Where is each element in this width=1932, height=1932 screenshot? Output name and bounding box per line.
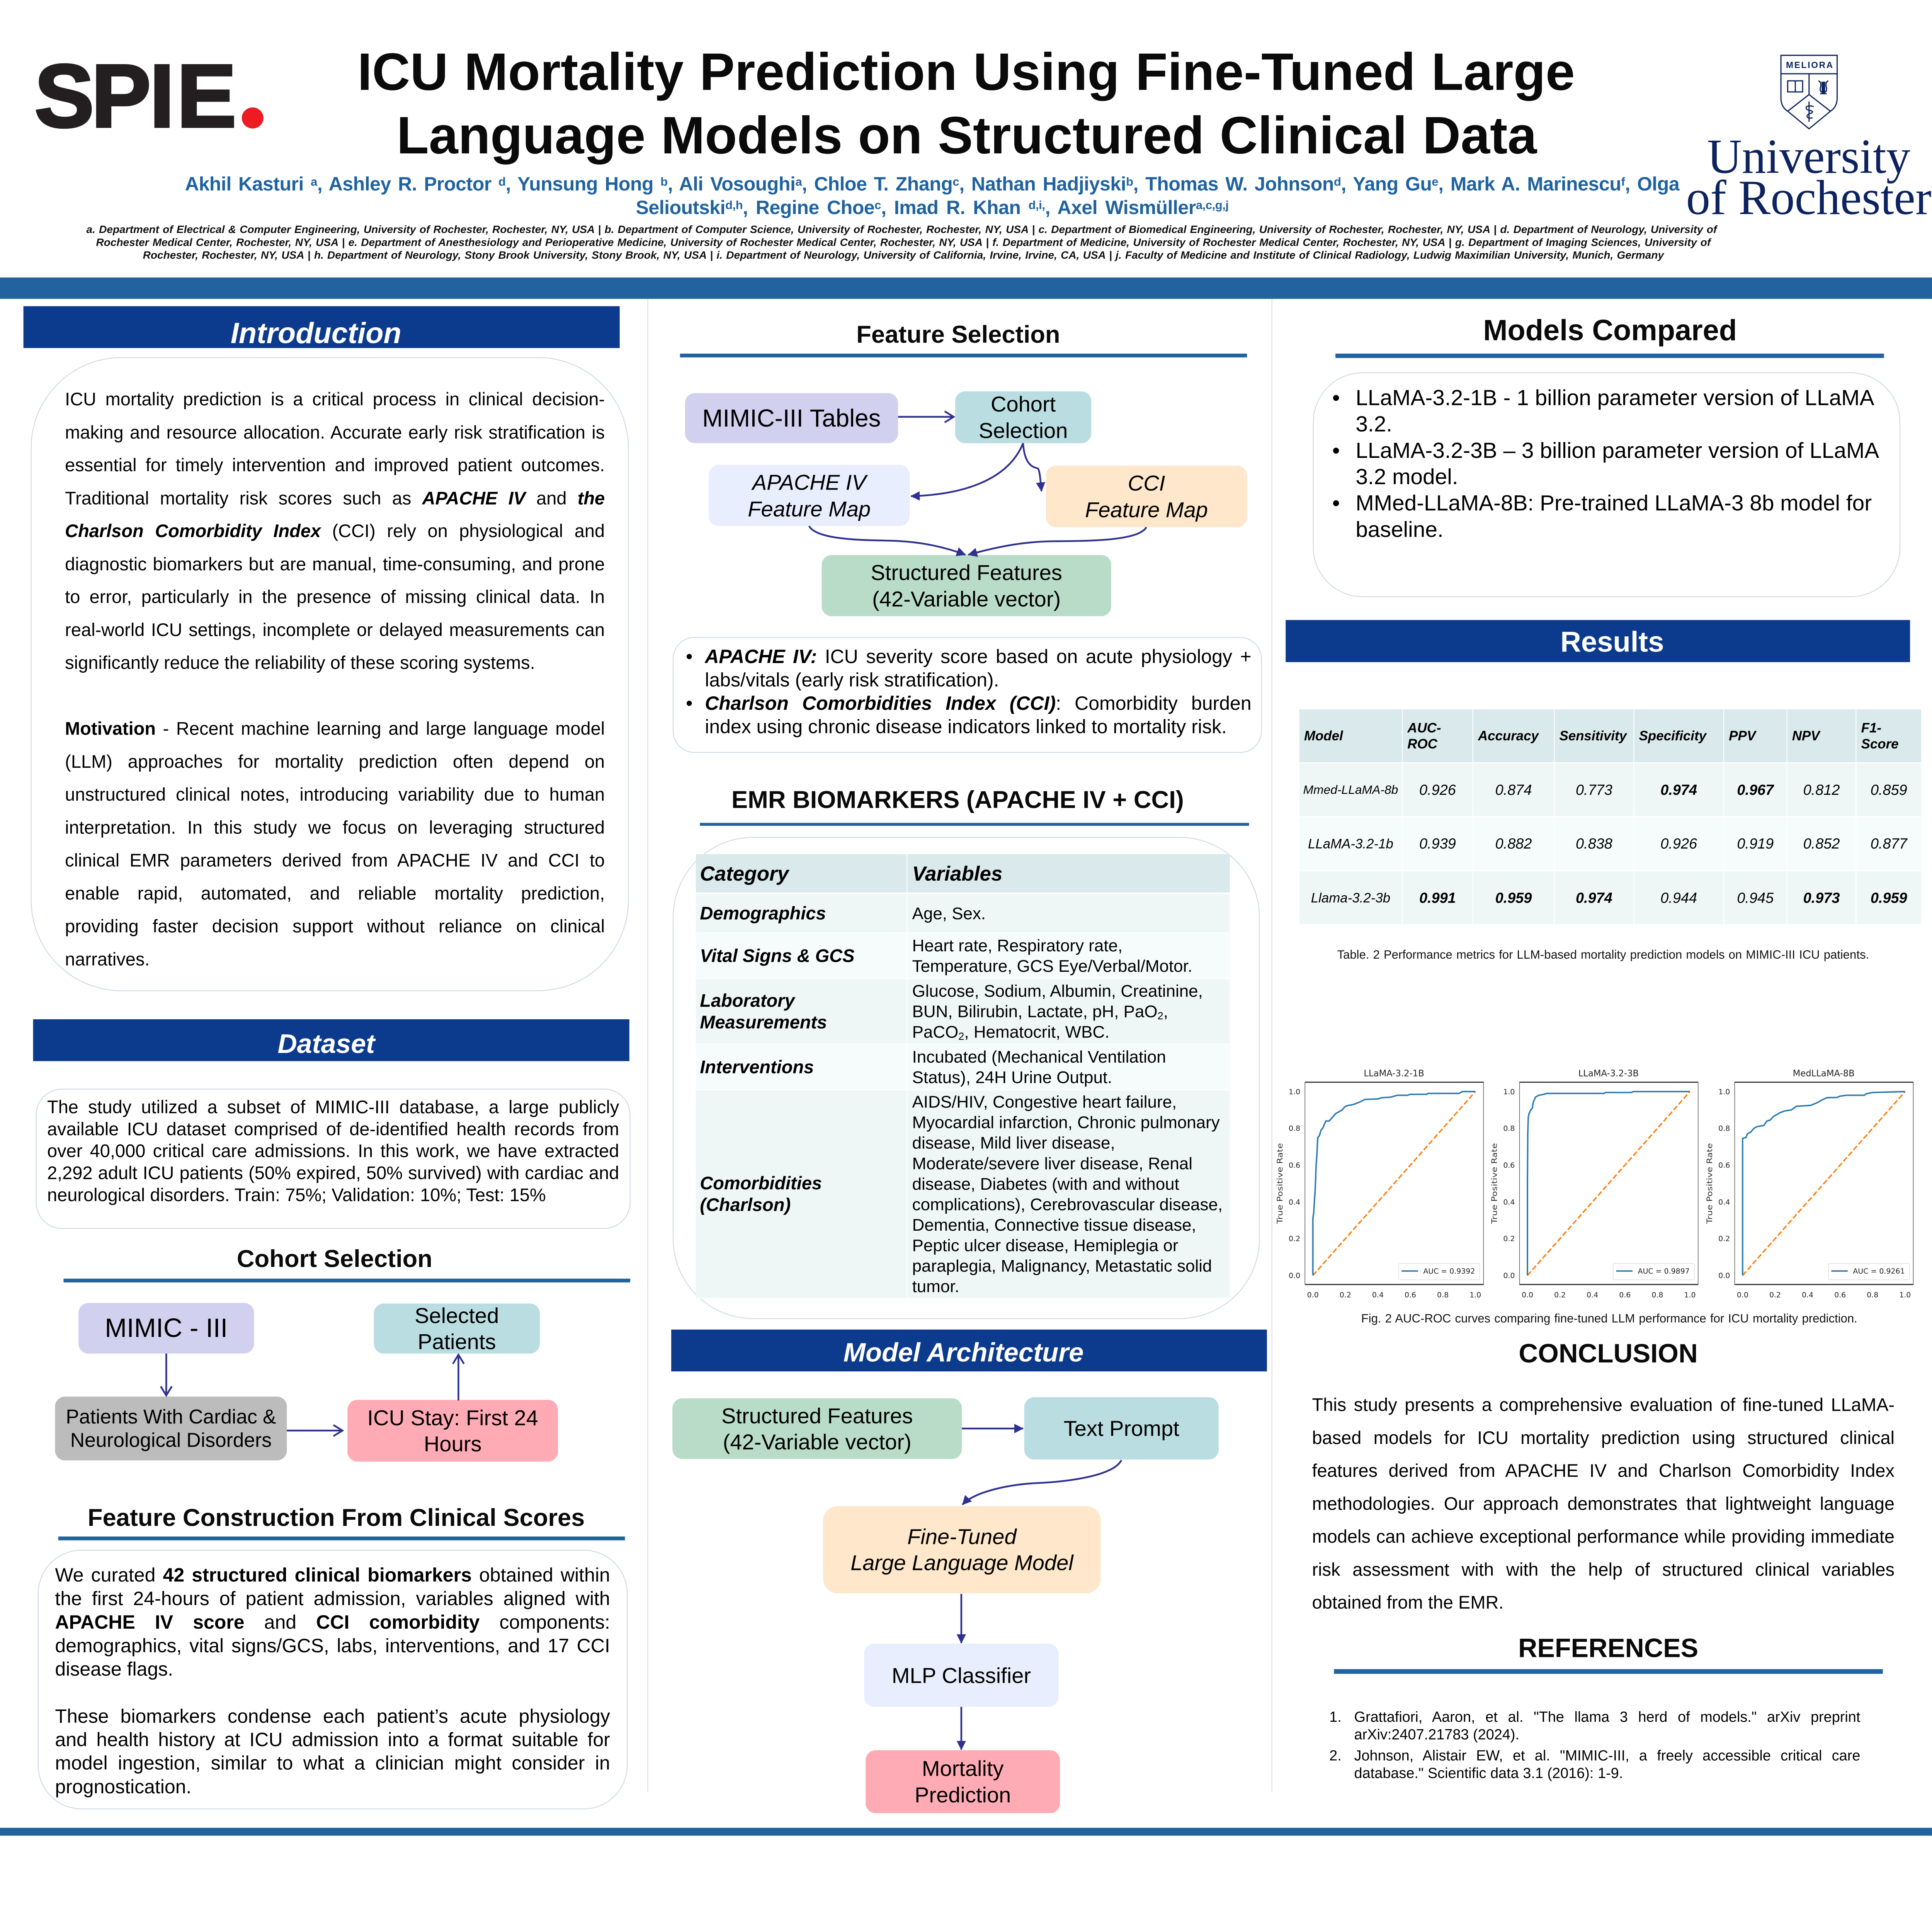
figure caption: Fig. 2 AUC-ROC curves comparing fine-tuned LLM performance for ICU mortality prediction.	[1361, 1312, 1857, 1325]
table: performance metrics: Mmed-LLaMA-8b	[1303, 783, 1398, 796]
box: MIMIC-III Tables: MIMIC-III Tables	[702, 404, 881, 432]
chart: ROC LLaMA-3.2-3B: 1.0	[1503, 1088, 1515, 1096]
box: CCI Feature Map: CCI	[1128, 471, 1165, 495]
conclusion text: based models for ICU mortality prediction using structured clinical	[1312, 1428, 1895, 1448]
chart: ROC LLaMA-3.2-1B: 0.0	[1289, 1272, 1300, 1280]
feature construction text: demographics, vital signs/GCS, labs, interventions, and 17 CCI	[55, 1634, 610, 1656]
table: performance metrics: 0.877	[1871, 835, 1907, 852]
chart: ROC LLaMA-3.2-1B: 0.8	[1289, 1124, 1300, 1133]
logo: University of Rochester: University	[1707, 129, 1910, 184]
table: performance metrics: 0.852	[1803, 835, 1840, 852]
table: performance metrics: Model	[1304, 728, 1343, 743]
box: CCI Feature Map	[1046, 466, 1247, 527]
panel: results	[1276, 620, 1921, 1328]
chart: ROC LLaMA-3.2-3B: 0.6	[1503, 1161, 1515, 1170]
reference list: 1.	[1329, 1709, 1342, 1725]
dataset text	[47, 1096, 619, 1206]
chart: ROC LLaMA-3.2-3B: 0.4	[1587, 1291, 1598, 1299]
score definitions text: labs/vitals (early risk stratification).	[705, 669, 999, 690]
table: categories and variables: complications), Cerebrovascular disease,	[912, 1195, 1223, 1214]
table: performance metrics: 0.944	[1660, 889, 1697, 906]
table: categories and variables: Age, Sex.	[912, 904, 986, 923]
arrow: Large Language Model to MLP	[960, 1594, 963, 1643]
feature construction text: prognostication.	[55, 1776, 191, 1797]
introduction text: Traditional mortality risk scores such as APACHE IV and the	[65, 488, 605, 509]
introduction text: diagnostic biomarkers but are manual, time-consuming, and prone	[65, 554, 605, 574]
heading: Dataset: Dataset	[277, 1029, 375, 1059]
heading: Models Compared: Models Compared	[1483, 314, 1737, 347]
model list: LLaMA-3.2-3B – 3 billion parameter version of LLaMA	[1355, 438, 1879, 463]
heading: Conclusion: CONCLUSION	[1519, 1338, 1698, 1368]
chart: ROC LLaMA-3.2-1B: 0.6	[1405, 1291, 1416, 1299]
chart: ROC LLaMA-3.2-3B: 0.2	[1554, 1291, 1566, 1299]
model list: 3.2.	[1355, 412, 1392, 436]
authors	[185, 172, 1679, 219]
heading: Introduction: Introduction	[231, 317, 401, 350]
panel: feature construction	[38, 1503, 628, 1810]
box: Cohort Selection: Selection	[979, 418, 1068, 442]
box: MIMIC-III Tables	[685, 393, 898, 443]
box: Structured Features: (42-Variable vector)	[872, 587, 1061, 611]
chart: ROC LLaMA-3.2-1B: 0.6	[1289, 1161, 1300, 1170]
arrow: MIMIC to Patients	[165, 1354, 167, 1396]
score definitions text	[686, 645, 1252, 738]
table: categories and variables: Variables	[912, 862, 1002, 885]
heading: Dataset	[33, 1019, 629, 1061]
box: MIMIC - III: MIMIC - III	[105, 1313, 228, 1343]
panel: conclusion	[1312, 1339, 1895, 1719]
box: Selected Patients	[374, 1303, 540, 1354]
chart: ROC MedLLaMA-8B	[1706, 1063, 1917, 1306]
chart: ROC LLaMA-3.2-3B: 0.8	[1503, 1124, 1515, 1133]
box: Fine-Tuned Large Language Model: Large Language Model	[850, 1551, 1073, 1575]
chart: ROC MedLLaMA-8B: AUC = 0.9261	[1853, 1267, 1905, 1276]
introduction text: ICU mortality prediction is a critical process in clinical decision-	[65, 389, 605, 410]
introduction text: Motivation - Recent machine learning and large language model	[65, 719, 605, 739]
feature construction text: disease flags.	[55, 1658, 173, 1680]
table: categories and variables: Dementia, Connective tissue disease,	[912, 1215, 1196, 1234]
introduction text: clinical EMR parameters derived from APACHE IV and CCI to	[65, 850, 605, 871]
box: ICU Stay	[347, 1400, 558, 1462]
table: performance metrics: Sensitivity	[1560, 728, 1627, 743]
box: Structured Features: Structured Features	[871, 560, 1062, 584]
table: performance metrics: F1-	[1861, 720, 1881, 735]
chart: ROC LLaMA-3.2-3B: 0.0	[1522, 1291, 1533, 1299]
panel: EMR biomarkers	[673, 785, 1260, 1319]
table: performance metrics: 0.773	[1576, 782, 1612, 798]
feature construction text: and health history at ICU admission into a format suitable for	[55, 1729, 610, 1750]
table: categories and variables: Category	[700, 862, 789, 885]
table: performance metrics: PPV	[1729, 728, 1756, 743]
authors: Akhil Kasturi a, Ashley R. Proctor d, Yunsung Hong b, Ali Vosoughia, Chloe T. Zhangc, Nathan Hadjiyskib, Thomas W. Johnsond, Yang Gue, Mark A. Marinescuf, Olga	[185, 173, 1679, 195]
rounded text panel	[31, 357, 629, 991]
title	[357, 40, 1575, 167]
model list: LLaMA-3.2-1B - 1 billion parameter version of LLaMA	[1355, 385, 1874, 410]
box: Fine-Tuned Large Language Model	[823, 1506, 1100, 1593]
box: Patients With Cardiac and Neurological Disorders: Patients With Cardiac &	[66, 1406, 276, 1428]
chart: ROC LLaMA-3.2-1B: 1.0	[1289, 1088, 1300, 1096]
box: Mortality Prediction: Mortality	[922, 1756, 1004, 1781]
table: performance metrics: 0.991	[1419, 889, 1456, 906]
chart: ROC LLaMA-3.2-1B: 0.0	[1307, 1291, 1319, 1299]
model list	[1332, 384, 1888, 543]
table: categories and variables: Glucose, Sodium, Albumin, Creatinine,	[912, 981, 1203, 1000]
chart: ROC LLaMA-3.2-1B: LLaMA-3.2-1B	[1364, 1069, 1424, 1079]
chart: ROC LLaMA-3.2-3B: 0.6	[1619, 1291, 1631, 1299]
panel: models compared	[1313, 313, 1900, 597]
chart: ROC MedLLaMA-8B: 0.6	[1718, 1161, 1730, 1170]
dataset text: The study utilized a subset of MIMIC-III database, a large publicly	[47, 1097, 619, 1117]
chart: ROC MedLLaMA-8B: 0.2	[1769, 1291, 1781, 1299]
table: categories and variables: Heart rate, Respiratory rate,	[912, 936, 1122, 955]
arrow: Structured Features to Text Prompt	[962, 1427, 1023, 1430]
heading: Feature Construction From Clinical Scores: Feature Construction From Clinical Scores	[88, 1504, 585, 1531]
table: performance metrics: 0.859	[1871, 782, 1907, 798]
box: Text Prompt	[1024, 1397, 1219, 1459]
introduction text: narratives.	[65, 949, 150, 969]
arrow: Patients to ICU Stay	[287, 1429, 343, 1432]
feature construction text: These biomarkers condense each patient’s acute physiology	[55, 1705, 610, 1727]
panel: references	[1329, 1634, 1883, 1786]
box: Structured Features: (42-Variable vector)	[723, 1430, 912, 1454]
introduction text: unstructured clinical notes, introducing variability due to human	[65, 784, 605, 805]
panel: dataset	[33, 1019, 631, 1229]
model list: MMed-LLaMA-8B: Pre-trained LLaMA-3 8b model for	[1355, 491, 1872, 515]
rounded text panel	[38, 1550, 628, 1810]
box: Structured Features: Structured Features	[721, 1403, 913, 1428]
box: Patients With Cardiac and Neurological Disorders: Neurological Disorders	[70, 1429, 272, 1451]
chart: ROC MedLLaMA-8B: 0.8	[1867, 1291, 1878, 1299]
arrow: MIMIC-III Tables to Cohort Selection	[898, 416, 954, 418]
chart: ROC LLaMA-3.2-3B: 0.0	[1503, 1272, 1515, 1280]
box: Structured Features	[672, 1398, 962, 1459]
reference list: Johnson, Alistair EW, et al. "MIMIC-III, a freely accessible critical care	[1354, 1747, 1860, 1764]
arrow: Cohort Selection to CCI	[1023, 443, 1041, 491]
chart: ROC LLaMA-3.2-1B	[1276, 1063, 1487, 1306]
heading: Cohort Selection: Cohort Selection	[237, 1245, 432, 1272]
introduction text: providing faster decision support without reliance on clinical	[65, 916, 605, 936]
chart: ROC MedLLaMA-8B: 0.4	[1802, 1291, 1813, 1299]
panel: model architecture	[671, 1330, 1267, 1813]
arrow: APACHE to Structured Features	[809, 526, 965, 555]
box: APACHE IV Feature Map: APACHE IV	[752, 470, 866, 494]
table: performance metrics: 0.974	[1576, 889, 1612, 906]
conclusion text: features derived from APACHE IV and Charlson Comorbidity Index	[1312, 1461, 1895, 1481]
table: performance metrics: 0.919	[1737, 835, 1774, 852]
box: ICU Stay: Hours	[424, 1432, 481, 1456]
table: performance metrics: NPV	[1792, 728, 1820, 743]
heading: Feature Selection: Feature Selection	[856, 321, 1060, 348]
introduction text: real-world ICU settings, incomplete or delayed measurements can	[65, 620, 605, 640]
chart: ROC LLaMA-3.2-3B: 0.2	[1503, 1235, 1515, 1243]
box: Selected Patients: Patients	[418, 1330, 496, 1354]
feature construction text: the first 24-hours of patient admission, variables aligned with	[55, 1588, 610, 1609]
table: categories and variables: disease, Diabetes (with and without	[912, 1174, 1179, 1193]
heading: Results: Results	[1560, 626, 1664, 658]
feature construction text: We curated 42 structured clinical biomarkers obtained within	[55, 1564, 610, 1586]
table: categories and variables: AIDS/HIV, Congestive heart failure,	[912, 1092, 1177, 1111]
panel: cohort selection	[55, 1244, 630, 1462]
table: performance metrics: LLaMA-3.2-1b	[1308, 836, 1393, 851]
box: Selected Patients: Selected	[415, 1303, 499, 1328]
title: ICU Mortality Prediction Using Fine-Tuned Large	[357, 43, 1575, 101]
box: Cohort Selection: Cohort	[991, 392, 1056, 416]
logo: University of Rochester	[1683, 53, 1932, 219]
table: performance metrics: Score	[1861, 736, 1899, 751]
table: performance metrics: 0.973	[1803, 889, 1840, 906]
table: categories and variables: BUN, Bilirubin, Lactate, pH, PaO2,	[912, 1002, 1168, 1022]
score definitions text: •	[686, 692, 693, 714]
affiliations: Rochester Medical Center, Rochester, NY, USA | e. Department of Anesthesiology and Perioperative Medicine, University of Rochester Medical Center, Rochester, NY, USA | f. Department of Medicine, University of Rochester Medical Center, Rochester, NY, USA | g. Department of Imaging Sciences, University of	[96, 236, 1711, 248]
box: APACHE IV Feature Map: Feature Map	[748, 497, 871, 521]
rounded panel	[673, 837, 1260, 1319]
heading: Model Architecture	[671, 1330, 1267, 1371]
chart: ROC MedLLaMA-8B: 0.4	[1718, 1198, 1730, 1206]
chart: ROC LLaMA-3.2-1B: 0.2	[1289, 1235, 1300, 1243]
heading: References: REFERENCES	[1518, 1634, 1698, 1663]
conclusion text: methodologies. Our approach demonstrates that lightweight language	[1312, 1494, 1895, 1514]
chart: ROC LLaMA-3.2-1B: 0.2	[1340, 1291, 1351, 1299]
box: Mortality Prediction	[866, 1750, 1060, 1813]
table: categories and variables: Myocardial infarction, Chronic pulmonary	[912, 1113, 1220, 1132]
chart: ROC LLaMA-3.2-1B: 1.0	[1469, 1291, 1481, 1299]
chart: ROC LLaMA-3.2-1B: AUC = 0.9392	[1423, 1267, 1475, 1276]
chart: ROC LLaMA-3.2-1B: 0.4	[1289, 1198, 1300, 1206]
reference list	[1329, 1708, 1860, 1782]
table: performance metrics: 0.974	[1660, 782, 1697, 798]
table: categories and variables: Measurements	[700, 1012, 827, 1032]
score definitions text: index using chronic disease indicators linked to mortality risk.	[705, 716, 1227, 737]
header band	[0, 0, 1932, 299]
arrow: ICU Stay to Selected	[457, 1354, 459, 1400]
table: performance metrics: 0.926	[1419, 782, 1456, 798]
table: performance metrics: 0.959	[1495, 889, 1532, 906]
feature construction text: APACHE IV score and CCI comorbidity components:	[55, 1611, 610, 1633]
arrow: Text Prompt to Large Language Model	[963, 1460, 1121, 1505]
introduction text: essential for timely intervention and improved patient outcomes.	[65, 455, 605, 475]
box: Fine-Tuned Large Language Model: Fine-Tuned	[907, 1524, 1017, 1549]
feature construction text	[55, 1563, 610, 1798]
score definitions text: APACHE IV: ICU severity score based on acute physiology +	[705, 645, 1252, 667]
score definitions text: •	[686, 645, 693, 667]
introduction text: interpretation. In this study we focus on leveraging structured	[65, 818, 605, 838]
introduction text: enable rapid, automated, and reliable mortality prediction,	[65, 883, 605, 903]
model list: •	[1332, 491, 1340, 515]
table: categories and variables: Incubated (Mechanical Ventilation	[912, 1047, 1166, 1066]
table: categories and variables: disease, Mild liver disease,	[912, 1133, 1115, 1152]
chart: ROC LLaMA-3.2-3B: LLaMA-3.2-3B	[1578, 1069, 1639, 1079]
introduction text: making and resource allocation. Accurate early risk stratification is	[65, 422, 605, 442]
arrow: Cohort Selection to APACHE	[911, 443, 1023, 496]
table: performance metrics: 0.939	[1419, 835, 1456, 852]
heading: EMR Biomarkers: EMR BIOMARKERS (APACHE IV + CCI)	[731, 786, 1184, 813]
conclusion text: models can achieve exceptional performance while providing immediate	[1312, 1527, 1895, 1547]
chart: ROC LLaMA-3.2-3B	[1491, 1063, 1702, 1306]
table: performance metrics	[1299, 709, 1921, 924]
box: CCI Feature Map: Feature Map	[1085, 498, 1208, 522]
model list: •	[1332, 438, 1340, 463]
table: categories and variables: Vital Signs & GCS	[700, 946, 855, 966]
chart: ROC MedLLaMA-8B: 0.8	[1718, 1124, 1730, 1133]
reference list: database." Scientific data 3.1 (2016): 1-9.	[1354, 1765, 1623, 1781]
reference list: 2.	[1329, 1747, 1342, 1764]
model list: 3.2 model.	[1355, 464, 1458, 489]
rounded panel	[1313, 372, 1900, 597]
conclusion text: obtained from the EMR.	[1312, 1592, 1503, 1612]
table: categories and variables	[696, 854, 1230, 1299]
table: categories and variables: Status), 24H Urine Output.	[912, 1068, 1112, 1087]
box: APACHE IV Feature Map	[709, 465, 910, 526]
box: MLP Classifier	[864, 1644, 1058, 1707]
table caption: Table. 2 Performance metrics for LLM-based mortality prediction models on MIMIC-III ICU patients.	[1337, 948, 1869, 961]
affiliations	[86, 223, 1717, 262]
chart: ROC MedLLaMA-8B: 0.6	[1834, 1291, 1846, 1299]
header blue bar	[0, 277, 1932, 299]
chart: ROC MedLLaMA-8B: 0.0	[1718, 1272, 1730, 1280]
table: categories and variables: Peptic ulcer disease, Hemiplegia or	[912, 1236, 1178, 1255]
rounded text panel	[36, 1088, 631, 1229]
table: performance metrics: 0.945	[1737, 889, 1774, 906]
heading: Results	[1286, 620, 1910, 662]
panel: introduction	[24, 306, 629, 991]
table: performance metrics: Llama-3.2-3b	[1311, 890, 1390, 905]
model list: baseline.	[1355, 517, 1444, 542]
introduction text: significantly reduce the reliability of these scoring systems.	[65, 653, 535, 673]
reference list: Grattafiori, Aaron, et al. "The llama 3 herd of models." arXiv preprint	[1354, 1709, 1860, 1725]
table: categories and variables: (Charlson)	[700, 1195, 791, 1215]
heading: Model Architecture: Model Architecture	[844, 1338, 1083, 1367]
dataset text: over 40,000 critical care admissions. In this work, we have extracted	[47, 1141, 619, 1161]
table: categories and variables: PaCO2, Hematocrit, WBC.	[912, 1022, 1109, 1042]
table: performance metrics: 0.874	[1495, 782, 1532, 798]
introduction text: (LLM) approaches for mortality prediction often depend on	[65, 752, 605, 772]
chart: ROC LLaMA-3.2-1B: 0.8	[1437, 1291, 1449, 1299]
chart: ROC MedLLaMA-8B: 0.0	[1737, 1291, 1748, 1299]
conclusion text	[1312, 1389, 1895, 1619]
table: categories and variables: Interventions	[700, 1057, 814, 1077]
feature construction text: model ingestion, similar to what a clinician might consider in	[55, 1752, 610, 1774]
heading: Introduction	[24, 306, 620, 348]
table: performance metrics: 0.812	[1803, 782, 1840, 798]
table: categories and variables: tumor.	[912, 1277, 959, 1296]
introduction text: to error, particularly in the presence of missing clinical data. In	[65, 587, 605, 607]
table: performance metrics: 0.967	[1737, 782, 1774, 798]
box: MLP Classifier: MLP Classifier	[892, 1663, 1031, 1687]
box: Mortality Prediction: Prediction	[915, 1782, 1011, 1807]
panel: feature selection	[673, 320, 1262, 753]
chart: ROC MedLLaMA-8B: 0.2	[1718, 1235, 1730, 1243]
reference list: arXiv:2407.21783 (2024).	[1354, 1726, 1519, 1743]
chart: ROC LLaMA-3.2-3B: 1.0	[1684, 1291, 1696, 1299]
chart: ROC MedLLaMA-8B: 1.0	[1718, 1088, 1730, 1096]
affiliations: Rochester, Rochester, NY, USA | h. Department of Neurology, Stony Brook University, Stony Brook, NY, USA | i. Department of Neurology, University of California, Irvine, Irvine, CA, USA | j. Faculty of Medicine and Institute of Clinical Radiology, Ludwig Maximilian University, Munich, Germany	[143, 249, 1664, 261]
logo: University of Rochester: MELIORA	[1786, 60, 1833, 70]
authors: Selioutskid,h, Regine Choec, Imad R. Khan d,i,, Axel Wismüllera,c,g,j	[636, 196, 1229, 218]
box: Structured Features	[822, 555, 1111, 616]
arrow: MLP to Mortality Prediction	[960, 1707, 963, 1750]
box: Text Prompt: Text Prompt	[1064, 1416, 1179, 1440]
box: MIMIC - III	[78, 1303, 254, 1354]
table: performance metrics: 0.959	[1871, 889, 1907, 906]
footer blue bar	[0, 1828, 1932, 1836]
conclusion text: This study presents a comprehensive evaluation of fine-tuned LLaMA-	[1312, 1395, 1895, 1415]
table: performance metrics: 0.882	[1495, 835, 1532, 852]
dataset text: neurological disorders. Train: 75%; Validation: 10%; Test: 15%	[47, 1185, 546, 1205]
table: performance metrics: Specificity	[1639, 728, 1706, 743]
table: performance metrics: 0.926	[1660, 835, 1697, 852]
conclusion text: risk assessment with with the help of structured clinical variables	[1312, 1560, 1895, 1580]
introduction text	[65, 383, 605, 976]
table: performance metrics: Accuracy	[1478, 728, 1539, 743]
table: categories and variables: Temperature, GCS Eye/Verbal/Motor.	[912, 956, 1192, 976]
box: Patients With Cardiac and Neurological Disorders	[55, 1396, 287, 1461]
chart: ROC MedLLaMA-8B: 1.0	[1899, 1291, 1911, 1299]
score definitions text: Charlson Comorbidities Index (CCI): Comorbidity burden	[705, 692, 1252, 714]
chart: ROC MedLLaMA-8B: MedLLaMA-8B	[1793, 1069, 1855, 1079]
chart: ROC LLaMA-3.2-3B: 0.8	[1651, 1291, 1663, 1299]
chart: ROC LLaMA-3.2-3B: AUC = 0.9897	[1638, 1267, 1690, 1276]
box: Cohort Selection	[955, 391, 1091, 443]
table: performance metrics: 0.838	[1576, 835, 1612, 852]
table: categories and variables: paraplegia, Malignancy, Metastatic solid	[912, 1256, 1212, 1275]
title: Language Models on Structured Clinical Data	[397, 106, 1537, 165]
affiliations: a. Department of Electrical & Computer Engineering, University of Rochester, Rochester, NY, USA | b. Department of Computer Science, University of Rochester, Rochester, NY, USA | c. Department of Biomedical Engineering, University of Rochester, Rochester, NY, USA | d. Department of Neurology, University of	[86, 223, 1717, 235]
model list: •	[1332, 385, 1340, 410]
chart: ROC LLaMA-3.2-1B: 0.4	[1372, 1291, 1384, 1299]
introduction text: Charlson Comorbidity Index (CCI) rely on physiological and	[65, 521, 605, 541]
table: performance metrics: ROC	[1407, 736, 1437, 751]
chart: ROC LLaMA-3.2-3B: 0.4	[1503, 1198, 1515, 1206]
table: categories and variables: Moderate/severe liver disease, Renal	[912, 1154, 1192, 1173]
table: categories and variables: Demographics	[700, 903, 826, 923]
table: categories and variables: Laboratory	[700, 990, 795, 1011]
dataset text: available ICU dataset comprised of de-identified health records from	[47, 1119, 619, 1139]
table: categories and variables: Comorbidities	[700, 1173, 822, 1193]
arrow: CCI to Structured Features	[968, 527, 1146, 555]
box: ICU Stay: ICU Stay: First 24	[367, 1405, 538, 1430]
table: performance metrics: AUC-	[1407, 720, 1441, 735]
dataset text: 2,292 adult ICU patients (50% expired, 50% survived) with cardiac and	[47, 1163, 619, 1183]
rounded panel: score definitions	[673, 637, 1262, 753]
